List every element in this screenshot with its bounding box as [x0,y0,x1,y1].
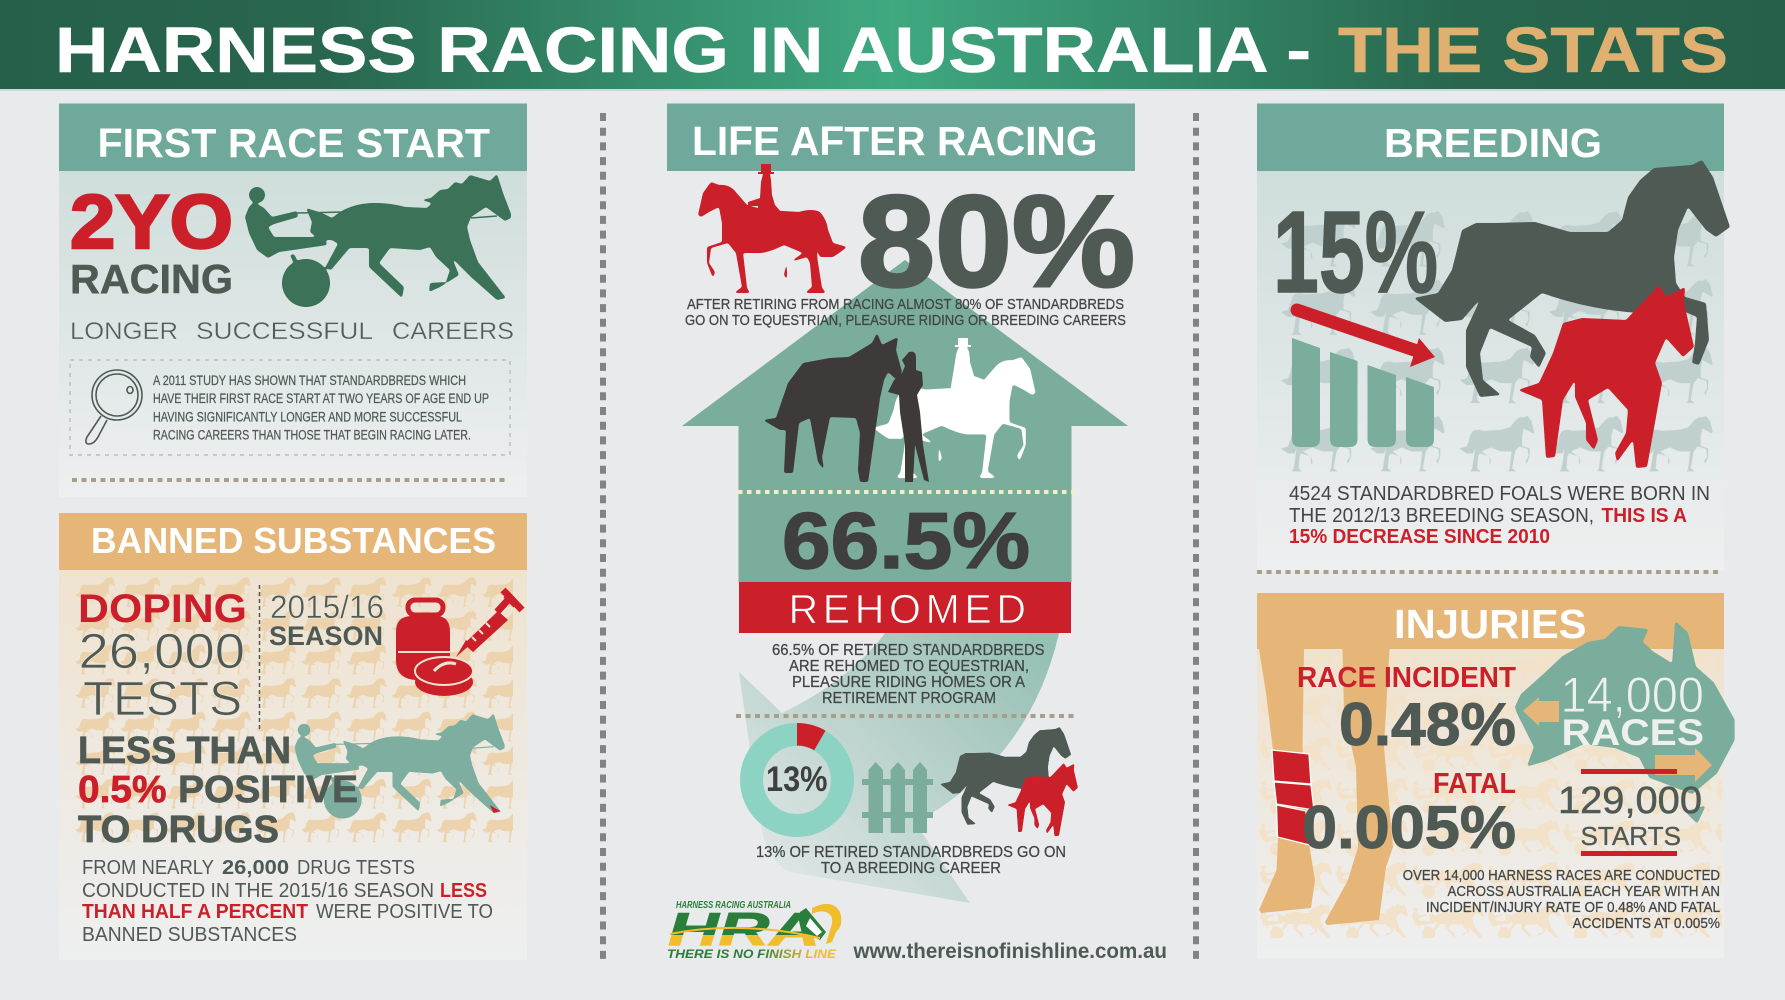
longer successful careers [70,318,514,345]
drug tests paragraph: THAN HALF A PERCENT [82,901,308,923]
heading: breeding: BREEDING [1384,120,1602,166]
icon: harness horse silhouette [295,713,505,819]
icon: map of Australia [1516,623,1734,822]
heading: life after racing [667,104,1135,171]
longer successful careers: CAREERS [392,318,514,345]
80 percent description: GO ON TO EQUESTRIAN, PLEASURE RIDING OR BREEDING CAREERS [685,313,1126,329]
66.5 percent stat: 66.5% [782,496,1030,585]
season label: 2015/16 [270,589,384,625]
house arrow [682,260,1128,582]
less than 0.5 percent positive [78,730,358,851]
arrow: downward trend [1297,310,1435,367]
title banner: THE STATS [1338,14,1728,86]
fatal stat: 0.005% [1302,794,1516,861]
logo: Harness Racing Australia [667,900,841,961]
heading: injuries: INJURIES [1394,601,1586,647]
injuries description: OVER 14,000 HARNESS RACES ARE CONDUCTED [1403,868,1720,884]
foals description: 4524 STANDARDBRED FOALS WERE BORN IN [1289,483,1710,505]
donut chart: 13 percent: 13% [766,760,828,799]
panel: injuries [1257,593,1734,958]
injuries description: ACCIDENTS AT 0.005% [1573,916,1720,932]
rehomed description [772,642,1044,707]
study text [153,373,489,442]
foals description: THIS IS A [1602,505,1687,527]
15 percent stat: 15% [1273,187,1438,317]
icon: foal [1518,285,1694,468]
rehomed description: RETIREMENT PROGRAM [822,690,996,707]
study callout box [70,360,510,455]
title banner: HARNESS RACING IN AUSTRALIA - [55,14,1311,86]
foals description: THE 2012/13 BREEDING SEASON, [1289,505,1594,527]
study text: RACING CAREERS THAN THOSE THAT BEGIN RACING LATER. [153,428,471,442]
icon: fence [862,762,933,833]
icon: medicine bottle, pill and syringe [396,590,522,696]
icon: dark horse [763,333,902,482]
race incident stat: 0.48% [1339,691,1516,758]
foals description [1289,483,1710,548]
icon: mare and foal small [940,727,1078,836]
website url: www.thereisnofinishline.com.au [853,940,1167,963]
race incident stat: RACE INCIDENT [1297,662,1516,694]
drug tests paragraph: FROM NEARLY [82,857,214,879]
drug tests paragraph: CONDUCTED IN THE 2015/16 SEASON [82,880,434,902]
study text: HAVING SIGNIFICANTLY LONGER AND MORE SUCCESSFUL [153,410,462,424]
icon: red horse and rider [698,164,847,293]
heading: life after racing: LIFE AFTER RACING [692,118,1098,164]
panel: first race start [59,104,527,497]
doping tests stat: TESTS [83,673,242,726]
129,000 starts stat [1558,769,1702,856]
icon: magnifying glass [86,370,142,444]
rehomed banner [739,582,1071,633]
breeding career description: 13% OF RETIRED STANDARDBREDS GO ON [756,844,1066,861]
icon: horse legs with bandage [1259,649,1393,925]
injuries description: ACROSS AUSTRALIA EACH YEAR WITH AN [1448,884,1720,900]
heading: banned substances: BANNED SUBSTANCES [91,520,496,561]
panel: life after racing [667,104,1135,903]
arrow: east [1655,748,1712,782]
less than 0.5 percent positive: POSITIVE [178,769,358,811]
129,000 starts stat: 129,000 [1558,780,1702,822]
14,000 races stat: 14,000 [1560,667,1704,723]
less than 0.5 percent positive: TO DRUGS [78,809,279,851]
80 percent description: AFTER RETIRING FROM RACING ALMOST 80% OF STANDARDBREDS [687,297,1124,313]
fatal stat [1302,768,1516,861]
race incident stat [1297,662,1516,758]
drug tests paragraph: 26,000 [222,857,289,879]
fatal stat: FATAL [1433,768,1516,800]
breeding career description [756,844,1066,877]
doping tests stat: DOPING [78,587,247,631]
14,000 races stat [1560,667,1704,753]
doping tests stat [78,587,247,726]
foals description: 15% DECREASE SINCE 2010 [1289,526,1550,548]
injuries description [1403,868,1720,932]
panel: banned substances [59,513,527,960]
drug tests paragraph: BANNED SUBSTANCES [82,924,297,946]
icon: mare [1414,160,1730,397]
title banner [0,0,1785,91]
rehomed description: PLEASURE RIDING HOMES OR A [792,674,1026,691]
80 percent description [685,297,1126,329]
heading: first race start: FIRST RACE START [98,120,490,166]
season label: SEASON [269,621,383,651]
icon: harness horse and driver [245,174,511,307]
injuries description: INCIDENT/INJURY RATE OF 0.48% AND FATAL [1426,900,1720,916]
drug tests paragraph: LESS [440,880,487,902]
drug tests paragraph: WERE POSITIVE TO [316,901,493,923]
rehomed banner: REHOMED [788,586,1026,632]
racing label: RACING [70,256,233,302]
less than 0.5 percent positive: LESS THAN [78,730,291,772]
panel: breeding [1257,104,1730,572]
icon: white horse and rider [873,338,1036,478]
season label [269,589,384,651]
logo: Harness Racing Australia: HARNESS RACING AUSTRALIA [676,900,791,911]
icon: woman silhouette [888,352,929,482]
curved arrow [739,633,1059,903]
longer successful careers: LONGER [70,318,178,345]
14,000 races stat: RACES [1562,712,1704,753]
rehomed description: ARE REHOMED TO EQUESTRIAN, [789,658,1029,675]
logo: Harness Racing Australia: THERE IS NO FINISH LINE [667,949,836,961]
less than 0.5 percent positive: 0.5% [78,769,166,811]
column dividers [603,113,1196,964]
study text: HAVE THEIR FIRST RACE START AT TWO YEARS OF AGE END UP [153,391,489,406]
logo: Harness Racing Australia: HRA [668,903,820,955]
study text: A 2011 STUDY HAS SHOWN THAT STANDARDBREDS WHICH [153,373,466,388]
breeding career description: TO A BREEDING CAREER [821,860,1001,877]
doping tests stat: 26,000 [78,625,245,679]
drug tests paragraph [82,857,493,946]
longer successful careers: SUCCESSFUL [196,318,373,345]
2YO stat: 2YO [70,180,233,265]
arrow: west [1523,697,1559,726]
rehomed description: 66.5% OF RETIRED STANDARDBREDS [772,642,1044,659]
80 percent stat: 80% [858,168,1135,314]
129,000 starts stat: STARTS [1580,821,1681,851]
drug tests paragraph: DRUG TESTS [297,857,415,879]
declining bars [1292,338,1434,447]
donut chart: 13 percent [752,723,842,826]
